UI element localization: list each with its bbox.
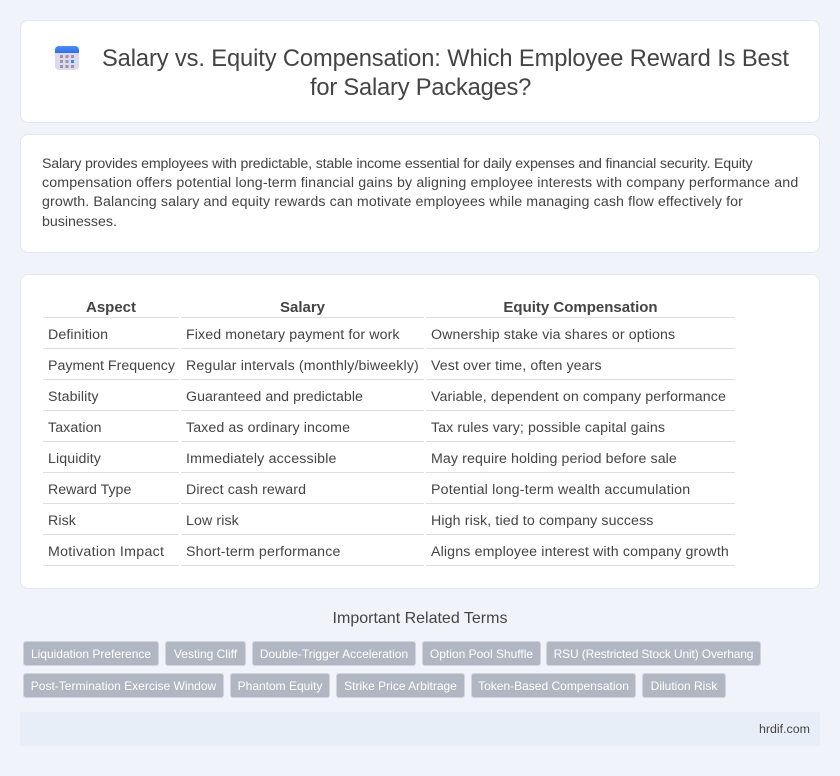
icon: calendar [55,46,79,70]
table: comparison: Guaranteed and predictable [186,389,363,405]
tags: related terms: Post-Termination Exercise Window [31,679,216,693]
title: for Salary Packages? [310,75,531,101]
panel: title header [20,20,820,123]
table: comparison: Taxation [48,420,102,436]
text block: introduction: Salary provides employees with predictable, stable income essential for daily expenses and financial security. Equity [42,156,752,172]
tags: related terms: Option Pool Shuffle [430,647,533,661]
table: comparison: High risk, tied to company success [431,513,654,529]
table: comparison: Regular intervals (monthly/biweekly) [186,358,419,374]
tags: related terms: Strike Price Arbitrage [344,679,457,693]
table: comparison: Salary [280,299,325,316]
panel: comparison table [20,274,820,589]
table: comparison: Reward Type [48,482,131,498]
table: comparison: Risk [48,513,76,529]
table: comparison: Tax rules vary; possible capital gains [431,420,665,436]
table: comparison: Direct cash reward [186,482,306,498]
table: comparison: Taxed as ordinary income [186,420,350,436]
tags: related terms: Vesting Cliff [174,647,237,661]
tags: related terms: Double-Trigger Acceleration [260,647,408,661]
table: comparison: Potential long-term wealth accumulation [431,482,690,498]
table: comparison: Low risk [186,513,239,529]
title [102,46,789,101]
table: comparison: Liquidity [48,451,101,467]
table: comparison: May require holding period before sale [431,451,677,467]
table: comparison: Variable, dependent on company performance [431,389,726,405]
footer: source: hrdif.com [759,722,810,736]
panel: introduction [20,134,820,253]
text block: introduction: businesses. [42,214,117,230]
text block: introduction: compensation offers potential long-term financial gains by aligning employee interests with company performance and [42,175,798,191]
table: comparison: Short-term performance [186,544,341,560]
table: comparison: Vest over time, often years [431,358,602,374]
text block: introduction [42,156,798,230]
tags: related terms: Liquidation Preference [31,647,151,661]
tags: related terms: Phantom Equity [238,679,322,693]
table: comparison: Aligns employee interest with company growth [431,544,729,560]
tags: related terms: Token-Based Compensation [478,679,629,693]
table: comparison: Stability [48,389,99,405]
text block: introduction: growth. Balancing salary and equity rewards can motivate employees while managing cash flow effectively for [42,194,743,210]
table: comparison: Ownership stake via shares or options [431,327,675,343]
table: comparison: Fixed monetary payment for work [186,327,400,343]
table: comparison: Motivation Impact [48,544,164,560]
table: comparison: Immediately accessible [186,451,337,467]
footer [20,712,820,746]
table: comparison: Payment Frequency [48,358,175,374]
table: comparison: Definition [48,327,108,343]
heading: important related terms: Important Related Terms [333,610,507,627]
table: comparison: Equity Compensation [503,299,658,316]
tags: related terms: RSU (Restricted Stock Unit) Overhang [554,647,753,661]
title: Salary vs. Equity Compensation: Which Employee Reward Is Best [102,46,789,72]
table: comparison: Aspect [86,299,136,316]
tags: related terms: Dilution Risk [651,679,717,693]
